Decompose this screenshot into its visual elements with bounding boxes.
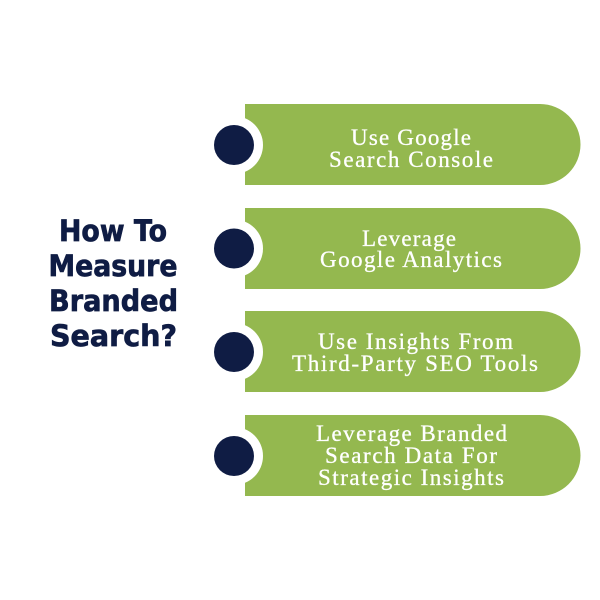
- panel: step 4: [205, 415, 580, 496]
- panel: step 2: [205, 208, 580, 289]
- text: step 1 label: Use Google: [351, 125, 471, 150]
- text: step 4 label: Leverage Branded: [316, 421, 508, 446]
- title: Measure: [48, 249, 178, 283]
- text: step 4 label: [316, 421, 508, 490]
- text: step 3 label: [292, 329, 538, 376]
- text: step 1 label: [329, 125, 493, 172]
- text: step 4 label: Search Data For: [325, 443, 497, 468]
- text: step 1 label: Search Console: [329, 147, 493, 172]
- text: step 2 label: [320, 226, 502, 272]
- text: step 3 label: Third-Party SEO Tools: [292, 351, 538, 376]
- panel: step 1: [205, 104, 580, 185]
- icon: step 3 dot: [214, 332, 254, 372]
- title: How To: [59, 214, 167, 248]
- icon: step 1 dot: [214, 125, 254, 165]
- title: [48, 214, 178, 353]
- text: step 3 label: Use Insights From: [318, 329, 513, 354]
- panel: step 3: [205, 311, 580, 392]
- text: step 4 label: Strategic Insights: [318, 465, 504, 490]
- title: Branded: [49, 284, 178, 318]
- icon: step 4 dot: [214, 436, 254, 476]
- text: step 2 label: Leverage: [362, 226, 456, 251]
- text: step 2 label: Google Analytics: [320, 247, 502, 272]
- title: Search?: [50, 319, 177, 353]
- icon: step 2 dot: [214, 228, 254, 268]
